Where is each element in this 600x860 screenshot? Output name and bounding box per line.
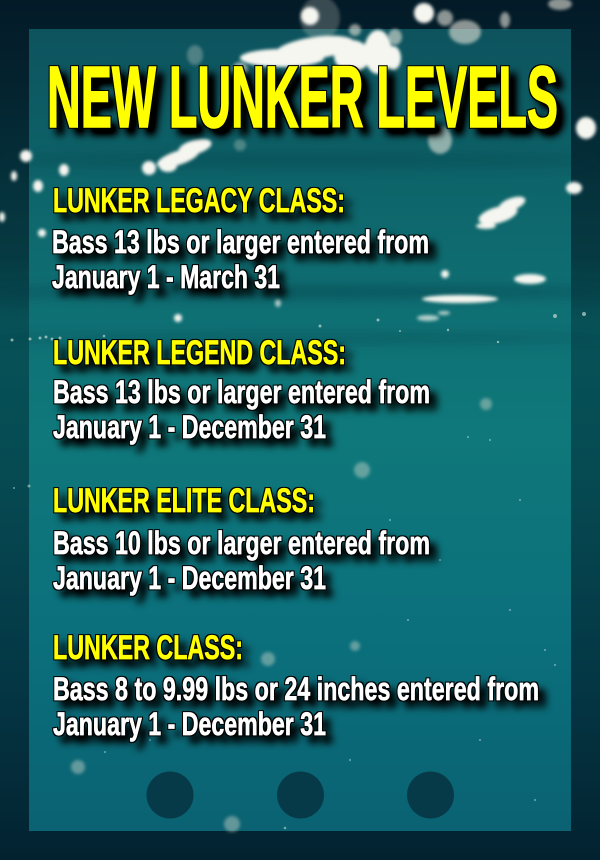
body: Elite requirement: Bass 10 lbs or larger entered from <box>53 525 430 561</box>
heading: Lunker Legacy: LUNKER LEGACY CLASS: <box>53 182 345 220</box>
body: Legend requirement: Bass 13 lbs or larger entered from <box>53 374 430 410</box>
body: Lunker dates: January 1 - December 31 <box>53 706 326 742</box>
body: Legend dates: January 1 - December 31 <box>53 409 326 445</box>
heading: Lunker Class: LUNKER CLASS: <box>53 629 243 667</box>
section: Lunker Class <box>53 629 539 742</box>
section: Lunker Legend Class <box>53 334 430 445</box>
heading: Lunker Legend: LUNKER LEGEND CLASS: <box>53 334 346 372</box>
body: Legacy requirement: Bass 13 lbs or larger entered from <box>52 224 429 260</box>
heading: Lunker Elite: LUNKER ELITE CLASS: <box>53 482 315 520</box>
dot: right circle <box>407 772 454 818</box>
dot: middle circle <box>277 772 324 818</box>
body: Legacy dates: January 1 - March 31 <box>52 259 280 295</box>
dot: left circle <box>146 772 194 818</box>
section: Lunker Elite Class <box>53 482 430 596</box>
body: Elite dates: January 1 - December 31 <box>53 560 326 596</box>
section: Lunker Legacy Class <box>52 182 429 295</box>
